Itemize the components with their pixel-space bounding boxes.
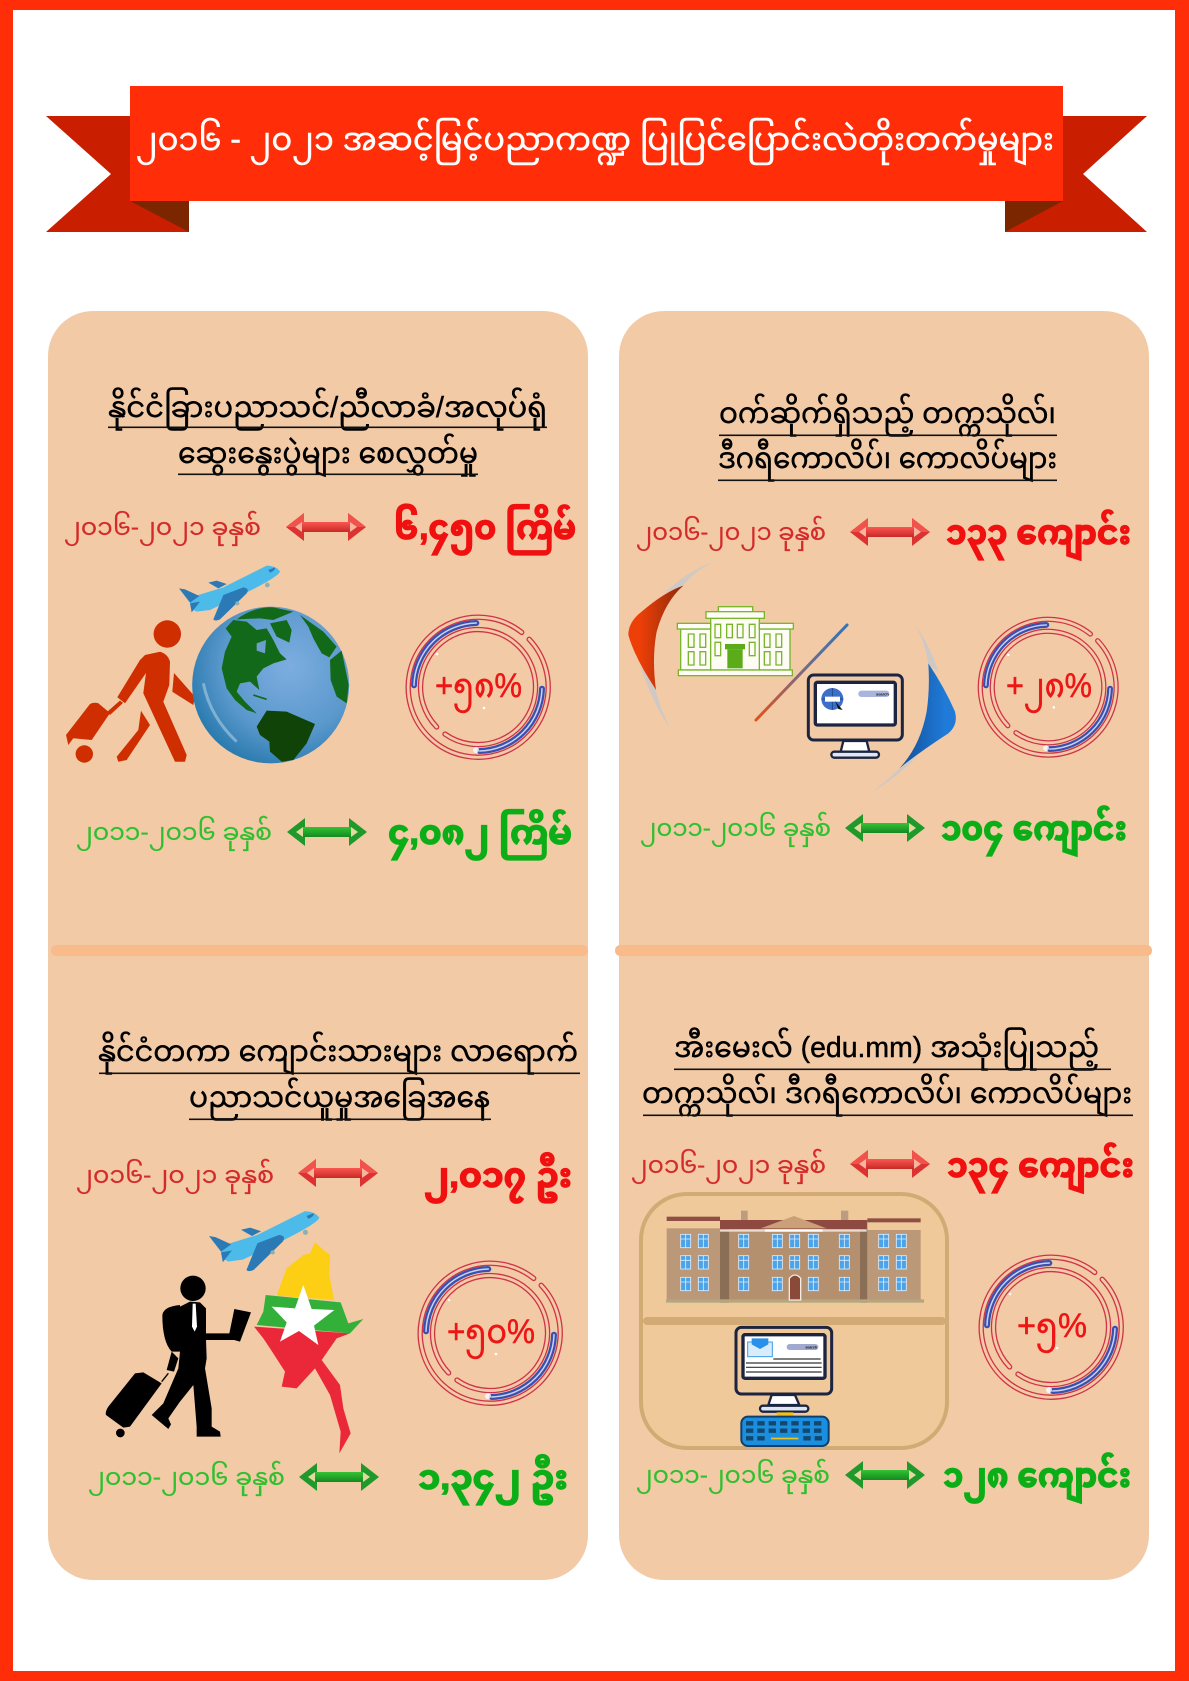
rounded image frame xyxy=(641,1194,947,1448)
heading: ပညာသင်ယူမှုအခြေအနေ xyxy=(189,1078,490,1121)
progress ring +5% xyxy=(981,1257,1121,1397)
icon: globe xyxy=(192,607,349,763)
value 133: ၁၃၃ ကျောင်း xyxy=(946,509,1131,561)
progress ring +28%: +၂၈% xyxy=(1006,667,1092,713)
icon: Myanmar flag map xyxy=(254,1242,363,1453)
progress ring +28% xyxy=(980,619,1116,755)
panel: left column background xyxy=(48,311,588,1580)
icon: monitor website xyxy=(808,675,902,758)
progress ring +58%: +၅၈% xyxy=(435,667,522,713)
panel: universities with websites xyxy=(628,394,1131,857)
icon: monitor with email and keyboard: search xyxy=(805,1345,817,1349)
period label 2016-2021: ၂၀၁၆-၂၀၂၁ ခုနှစ် xyxy=(631,1149,826,1184)
progress ring +50%: +၅၀% xyxy=(447,1313,535,1359)
arrow green xyxy=(845,814,925,842)
title banner xyxy=(46,86,1147,232)
icon: airplane xyxy=(179,566,280,620)
arrow red xyxy=(286,513,366,541)
divider: right column xyxy=(615,945,1152,956)
value 134: ၁၃၄ ကျောင်း xyxy=(947,1142,1134,1194)
icon: monitor website: search xyxy=(876,691,889,696)
heading xyxy=(718,394,1057,482)
left ribbon tail xyxy=(46,116,189,232)
divider slash xyxy=(756,625,847,720)
arrow red xyxy=(298,1159,378,1187)
arrow red xyxy=(850,1150,930,1178)
period label 2016-2021: ၂၀၁၆-၂၀၂၁ ခုနှစ် xyxy=(636,516,826,551)
period label 2011-2016: ၂၀၁၁-၂၀၁၆ ခုနှစ် xyxy=(636,1459,830,1494)
panel: foreign workshops and conferences xyxy=(64,388,576,860)
decorative swoosh: orange xyxy=(628,561,715,728)
arrow green xyxy=(287,818,367,846)
icon: traveller xyxy=(66,620,195,763)
icon: brown university building xyxy=(666,1211,924,1303)
progress ring +58% xyxy=(408,617,548,757)
heading: ဒီဂရီကောလိပ်၊ ကောလိပ်များ xyxy=(718,439,1057,482)
value 6,450: ၆,၄၅၀ ကြိမ် xyxy=(394,503,576,555)
period label 2016-2021: ၂၀၁၆-၂၀၂၁ ခုနှစ် xyxy=(64,511,261,546)
arrow green xyxy=(845,1461,925,1489)
right ribbon fold xyxy=(1005,201,1063,232)
value 104: ၁၀၄ ကျောင်း xyxy=(941,805,1127,857)
heading xyxy=(642,1028,1133,1117)
period label 2016-2021: ၂၀၁၆-၂၀၂၁ ခုနှစ် xyxy=(76,1159,274,1194)
left ribbon fold xyxy=(130,201,189,232)
title text: ၂၀၁၆ - ၂၀၂၁ အဆင့်မြင့်ပညာကဏ္ဍ ပြုပြင်ပြောင်းလဲတိုးတက်မှုများ xyxy=(136,116,1054,166)
divider: left column xyxy=(51,945,588,956)
heading: ဆွေးနွေးပွဲများ စေလွှတ်မှု xyxy=(178,434,478,477)
panel: right column background xyxy=(619,311,1149,1580)
value 4,082: ၄,၀၈၂ ကြိမ် xyxy=(388,809,572,860)
heading xyxy=(98,1032,580,1121)
period label 2011-2016: ၂၀၁၁-၂၀၁၆ ခုနှစ် xyxy=(640,812,831,847)
value 128: ၁၂၈ ကျောင်း xyxy=(943,1452,1131,1504)
heading: ဝက်ဆိုက်ရှိသည့် တက္ကသိုလ်၊ xyxy=(719,394,1056,437)
heading: နိုင်ငံခြားပညာသင်/ညီလာခံ/အလုပ်ရုံ xyxy=(108,388,547,431)
frame divider xyxy=(643,1317,946,1325)
icon: monitor with email and keyboard xyxy=(736,1327,832,1446)
period label 2011-2016: ၂၀၁၁-၂၀၁၆ ခုနှစ် xyxy=(88,1461,285,1496)
icon: airplane xyxy=(209,1211,319,1271)
arrow red xyxy=(850,518,930,546)
icon: school building xyxy=(677,607,793,676)
decorative swoosh: blue xyxy=(870,625,956,793)
heading xyxy=(108,388,547,477)
icon: business traveller xyxy=(106,1276,251,1437)
banner body xyxy=(130,86,1063,201)
panel: edu.mm email use xyxy=(631,1028,1134,1504)
heading: နိုင်ငံတကာ ကျောင်းသားများ လာရောက် xyxy=(98,1032,578,1075)
heading: တက္ကသိုလ်၊ ဒီဂရီကောလိပ်၊ ကောလိပ်များ xyxy=(642,1074,1132,1117)
arrow green xyxy=(299,1463,379,1491)
value 2,017: ၂,၀၁၇ ဦး xyxy=(424,1153,572,1203)
right ribbon tail xyxy=(1005,116,1147,232)
period label 2011-2016: ၂၀၁၁-၂၀၁၆ ခုနှစ် xyxy=(76,816,272,851)
progress ring +5%: +၅% xyxy=(1017,1307,1087,1353)
value 1,342: ၁,၃၄၂ ဦး xyxy=(418,1455,568,1505)
panel: international students xyxy=(76,1032,580,1505)
heading: အီးမေးလ် (edu.mm) အသုံးပြုသည့် xyxy=(674,1028,1099,1071)
progress ring +50% xyxy=(420,1263,560,1403)
